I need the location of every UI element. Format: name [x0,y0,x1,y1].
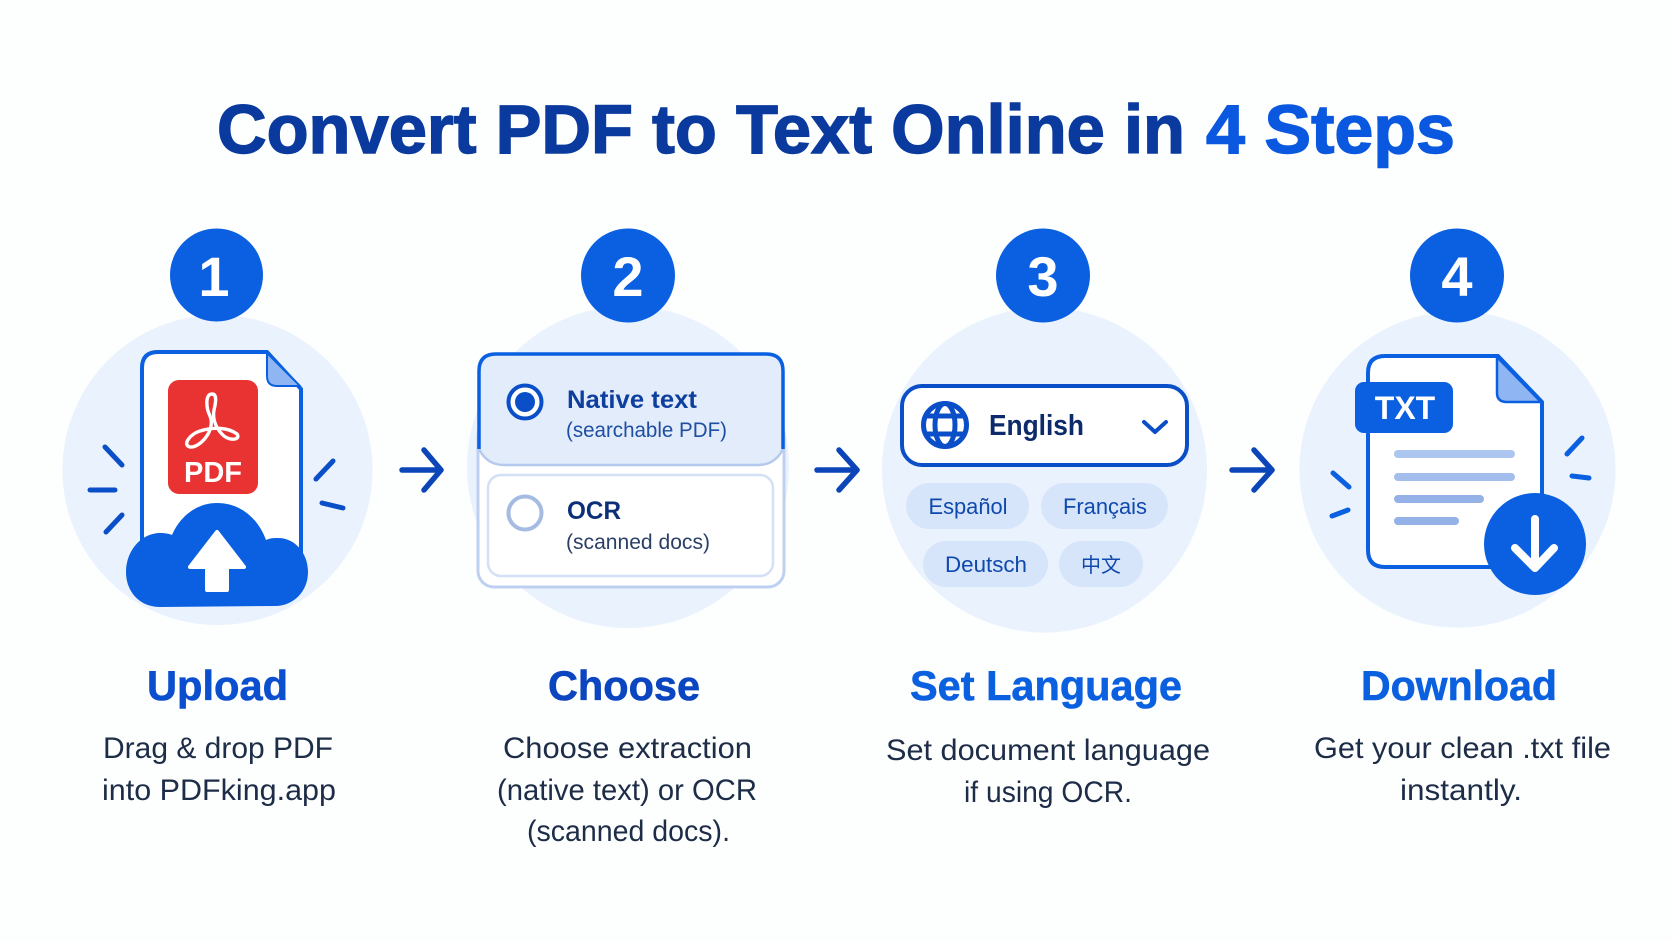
number badge 3 [996,228,1090,322]
option: OCR: OCR [567,497,621,525]
number badge 1 [170,228,263,322]
text: download description: Get your clean .txt file [1314,732,1611,765]
arrow: step 2 to 3 [817,450,857,490]
heading: Download: Download [1361,662,1557,709]
panel: step 3 set language [882,228,1207,632]
text: language description: if using OCR. [964,776,1132,809]
heading: Set Language: Set Language [910,662,1182,709]
pill: Français [1041,483,1168,529]
panel: step 2 choose [467,228,789,628]
option outer card [478,420,784,587]
number badge 2: 2 [612,245,644,308]
title: Convert PDF to Text Online in [217,91,1185,168]
background circle 3 [882,308,1207,632]
language dropdown: English [989,410,1084,442]
number badge 4: 4 [1441,245,1473,308]
arrow: step 1 to 2 [402,450,441,490]
text: language description: Set document language [886,734,1210,767]
icon: PDF document [142,352,301,560]
icon: globe [924,404,966,446]
text: upload description: Drag & drop PDF [103,732,333,765]
sparks around document [1332,438,1589,516]
text: choose description: (scanned docs). [527,815,730,848]
background circle 4 [1300,312,1616,628]
option: native text selected [479,354,783,465]
pill: Chinese: 中文 [1081,554,1121,577]
text: choose description [497,732,757,848]
pill: Deutsch: Deutsch [945,552,1027,577]
title: 4 Steps [1206,91,1455,168]
text: upload description: into PDFking.app [102,774,336,807]
pill: Français: Français [1063,494,1147,519]
panel: step 4 download [1300,228,1616,628]
background circle 1 [62,315,372,625]
language dropdown [902,386,1187,465]
icon: TXT document: TXT [1375,390,1436,426]
option: OCR: (scanned docs) [566,531,710,554]
number badge 4 [1410,228,1504,322]
number badge 2 [581,228,675,322]
text: language description [886,734,1210,809]
heading: Choose: Choose [548,662,700,709]
pill: Deutsch [923,541,1048,587]
text: choose description: (native text) or OCR [497,774,757,807]
option: native text selected: (searchable PDF) [566,419,727,442]
background circle 2 [467,306,789,628]
arrow: step 3 to 4 [1232,450,1272,490]
option: OCR [488,475,773,576]
pill: Español: Español [928,494,1008,519]
icon: upload cloud [126,503,308,607]
text: upload description [102,732,336,807]
icon: PDF document: PDF [184,457,242,489]
text: choose description: Choose extraction [503,732,752,765]
text: download description: instantly. [1400,774,1522,807]
icon: TXT document [1355,356,1542,567]
text: download description [1314,732,1611,807]
icon: download badge [1484,493,1586,595]
heading: Upload: Upload [147,662,288,709]
pill: Español [906,483,1029,529]
pill: Chinese [1059,541,1143,587]
panel: step 1 upload [62,228,372,625]
number badge 1: 1 [198,245,230,308]
number badge 3: 3 [1027,245,1059,308]
sparks left and right [90,447,343,532]
option: native text selected: Native text [567,386,698,414]
